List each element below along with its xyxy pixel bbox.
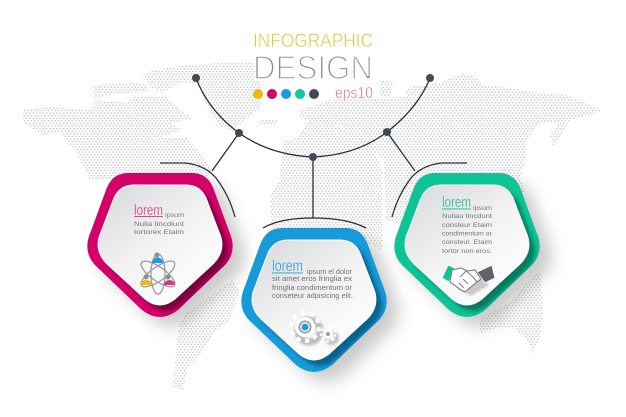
text block: consteur. Etaim — [442, 239, 492, 246]
text block: sit amet eros fringlia ex — [272, 274, 352, 283]
text block: consteur Etaim — [442, 222, 492, 229]
colour dots — [253, 89, 319, 99]
title — [253, 30, 373, 102]
dotted world map — [23, 62, 603, 390]
panel: pink pentagon — [87, 173, 245, 327]
heading: lorem: lorem — [272, 258, 303, 275]
text block: ipsum el dolor — [307, 267, 353, 276]
heading: lorem: lorem — [442, 194, 471, 211]
heading: lorem: ipsum — [165, 212, 184, 219]
icon: atom — [138, 252, 178, 294]
text block: Nulla tincdiunt — [134, 221, 184, 228]
panel: green pentagon — [394, 173, 552, 327]
heading: lorem: ipsum — [473, 205, 492, 212]
text block: tortor non eros. — [442, 248, 492, 255]
text block — [442, 213, 493, 255]
title: design: DESIGN — [253, 49, 373, 86]
connector nodes — [192, 74, 434, 161]
icon: gears — [291, 313, 337, 343]
text block — [272, 267, 353, 300]
panel: blue pentagon — [241, 228, 399, 382]
text block: Nullau tincdunt — [442, 213, 492, 220]
text block: conseteur adpisicing elit. — [272, 291, 353, 300]
text block — [134, 221, 184, 236]
title: infographic: INFOGRAPHIC — [253, 30, 373, 52]
eps label: eps10 — [335, 85, 373, 102]
text block: condimentum or — [442, 230, 493, 238]
icon: handshake — [442, 265, 495, 296]
text block: fringlia condimentum or — [272, 283, 353, 292]
connector lines — [160, 78, 467, 228]
text block: tortorex Etaim — [134, 229, 184, 236]
heading: lorem: lorem — [134, 202, 163, 219]
